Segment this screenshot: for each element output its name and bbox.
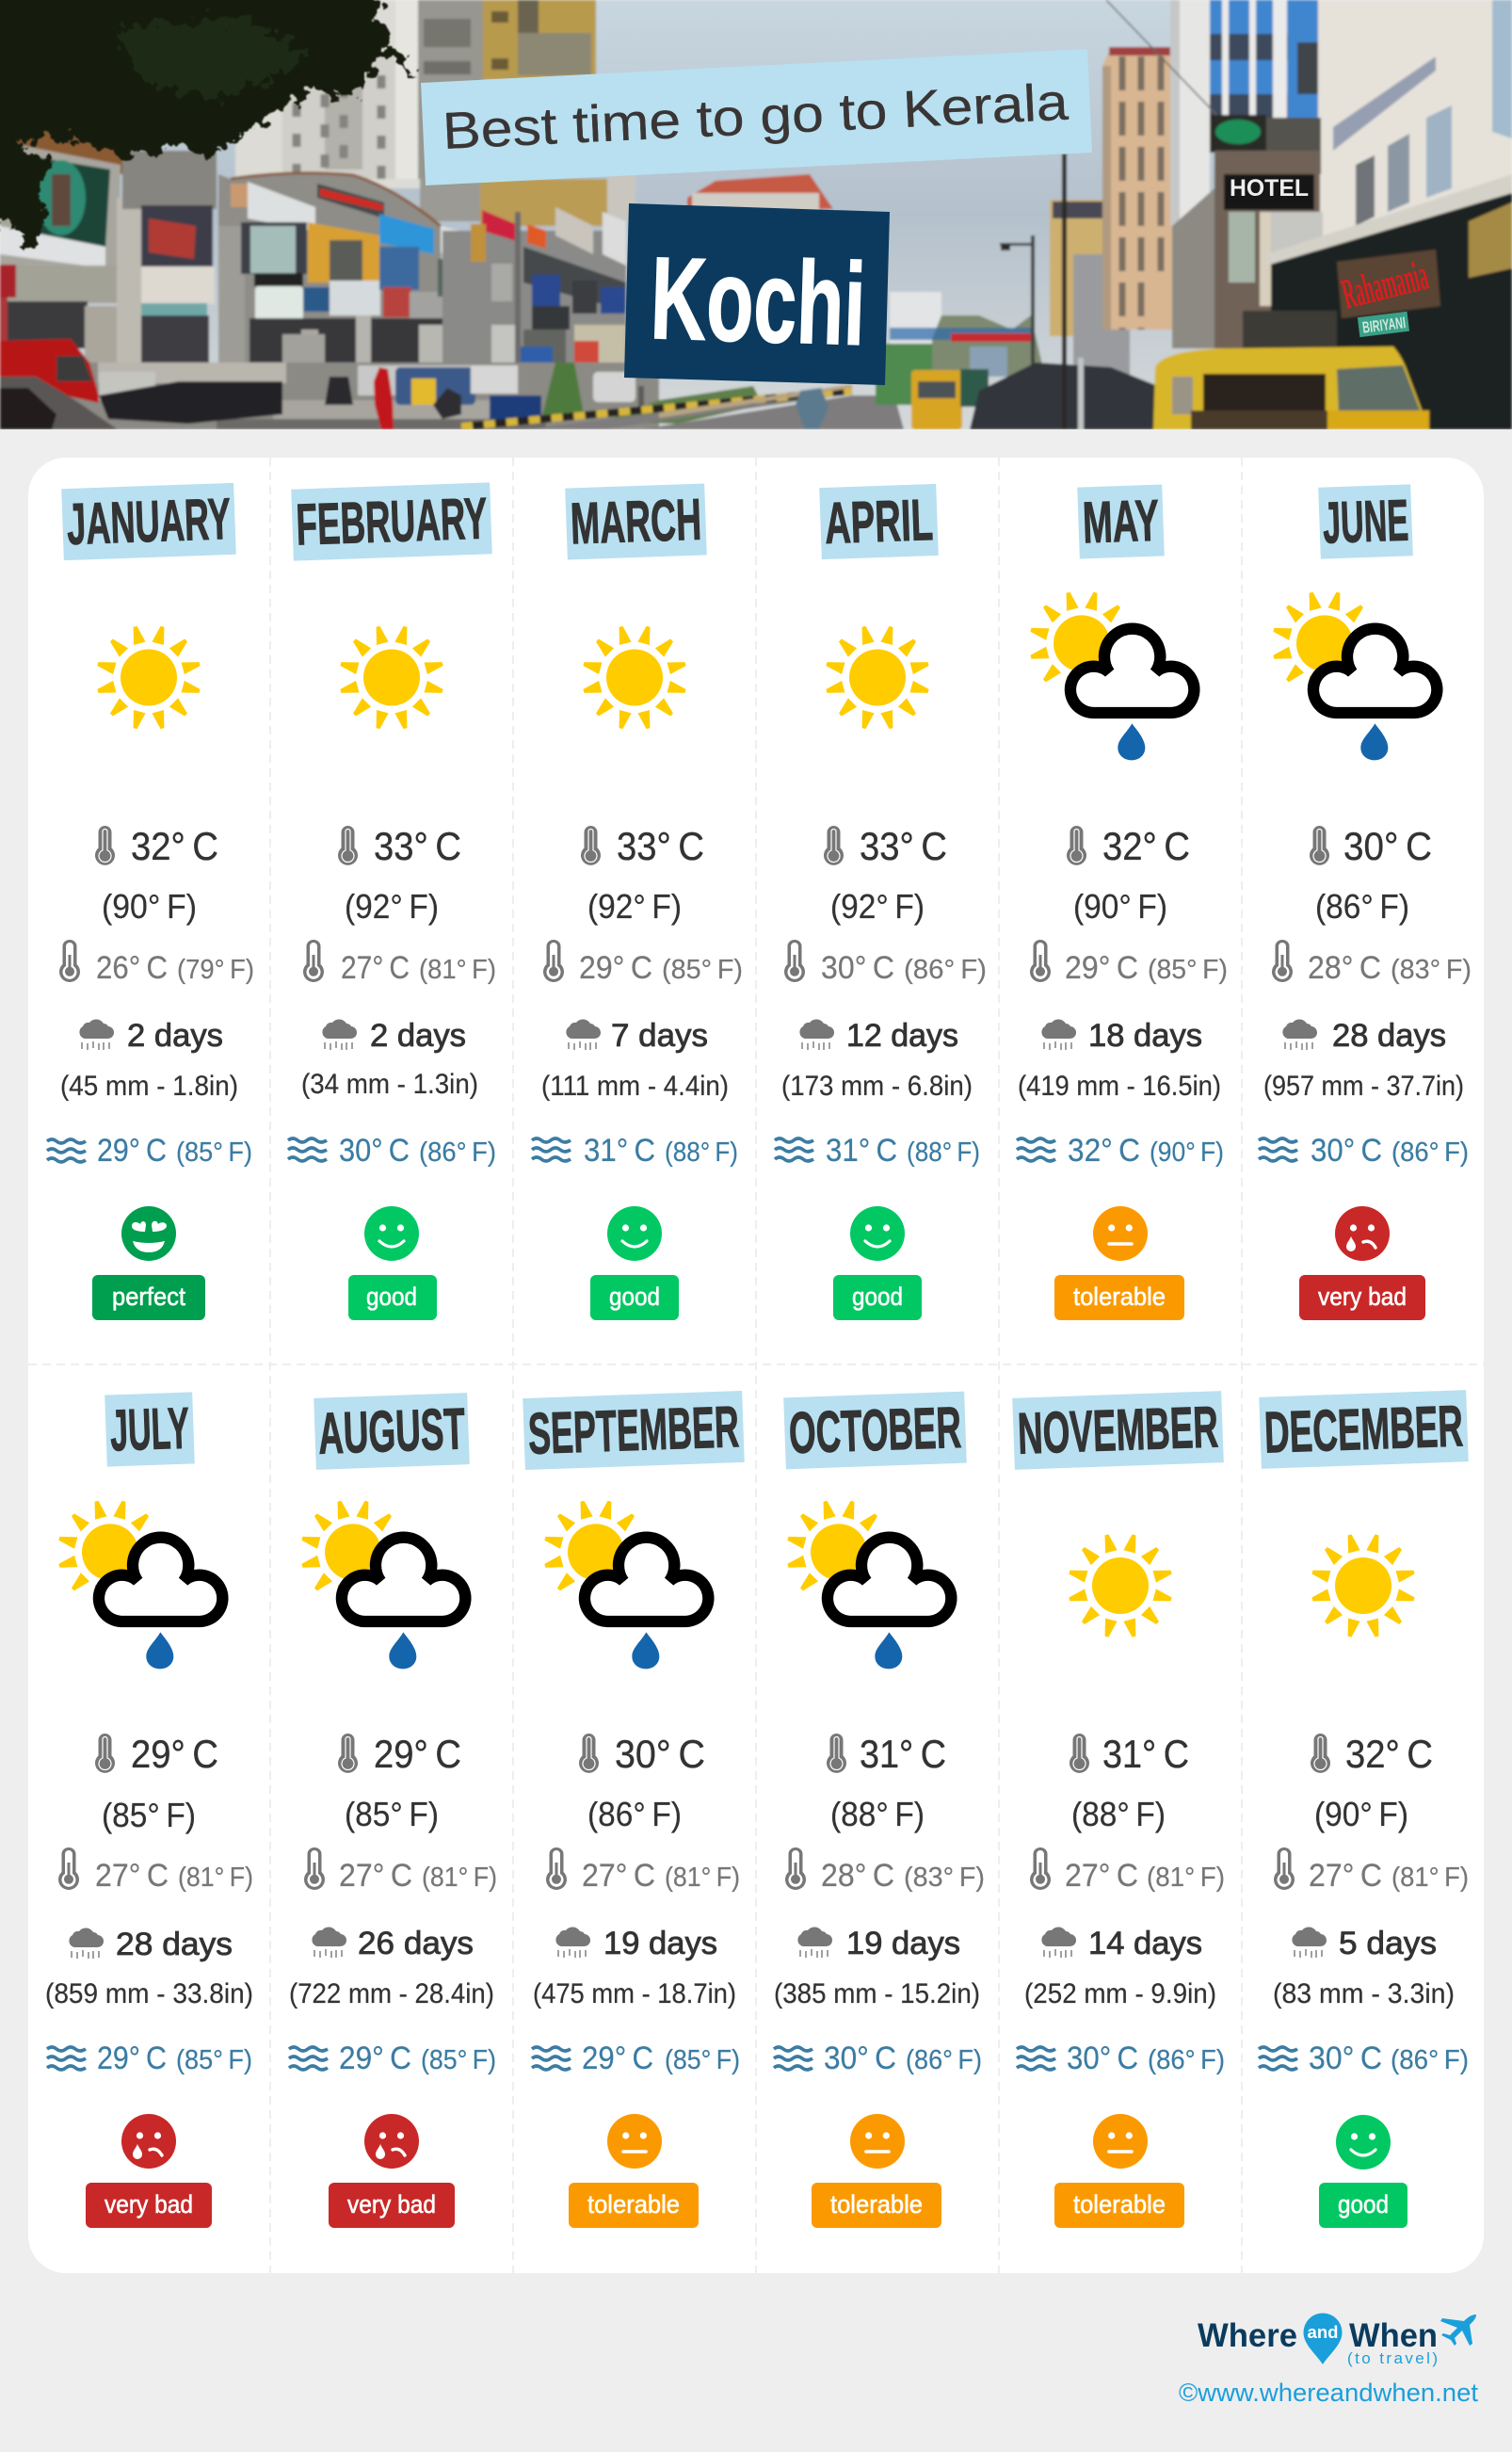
icon: rain cloud [1041,1019,1076,1050]
month heading: July [105,1392,195,1467]
logo pin: and [1307,2323,1339,2342]
photo signage: biryani: BIRIYANI [1361,314,1407,337]
icon: rain cloud [1282,1019,1317,1050]
rating badge: tolerable: tolerable [1073,2190,1166,2218]
icon: sun [1311,1533,1416,1638]
icon: face good [607,1206,662,1261]
icon: sun [96,625,201,730]
icon: rain cloud [312,1927,346,1958]
sea temperature: 30° C [339,1133,410,1169]
sea temperature Fahrenheit: (86° F) [419,1137,496,1168]
high temperature Fahrenheit: (86° F) [587,1795,682,1833]
month heading: August [314,1393,470,1470]
city label: Kochi: Kochi [649,234,867,370]
low temperature: 27° C [339,1858,412,1894]
icon: sea waves [47,2047,86,2070]
month heading: January: JANUARY [66,487,232,557]
rainy days: 18 days [1088,1018,1202,1054]
icon: sea waves [1259,1138,1297,1161]
rating badge: tolerable [812,2183,941,2228]
logo word: When: When [1349,2317,1438,2354]
icon: face tolerable [607,2114,662,2169]
high temperature Fahrenheit: (86° F) [1315,887,1409,926]
high temperature: 29° C [374,1732,461,1776]
icon: sea waves [1017,2047,1055,2070]
icon: rain cloud [79,1019,114,1050]
icon: sun, cloud and rain [57,1500,222,1669]
icon: rain cloud [566,1019,601,1050]
rating badge: very bad [86,2183,212,2228]
rating badge: good [833,1275,922,1320]
sea temperature Fahrenheit: (86° F) [1148,2045,1225,2075]
high temperature: 32° C [131,824,218,868]
rainy days: 14 days [1088,1926,1202,1961]
high temperature: 33° C [617,824,704,868]
sea temperature: 29° C [97,2041,167,2076]
month heading: November [1012,1391,1224,1470]
panel: April [775,484,987,1320]
panel: June [1259,484,1472,1320]
high temperature: 33° C [860,824,947,868]
rainy days: 2 days [370,1018,466,1054]
low temperature: 27° C [1065,1858,1138,1894]
low temperature: 27° C [95,1858,169,1894]
rating badge: very bad: very bad [105,2190,193,2218]
month heading: October: OCTOBER [788,1395,962,1466]
icon: rain cloud [69,1928,104,1959]
rating badge: tolerable [1054,1275,1184,1320]
icon: sea waves [532,2047,571,2070]
month heading: May: MAY [1082,489,1160,556]
tree [0,0,419,250]
sea temperature Fahrenheit: (85° F) [176,1137,252,1168]
high temperature: 30° C [1343,824,1432,868]
rating badge: good: good [1338,2190,1389,2218]
photo signage: hotel: HOTEL [1230,175,1309,202]
icon: thermometer high [827,1734,846,1773]
icon: sun, cloud and rain [543,1500,708,1669]
month heading: February: FEBRUARY [295,486,489,558]
icon: thermometer high [1067,826,1086,865]
rating badge: good: good [609,1282,660,1311]
icon: sea waves [47,1139,86,1162]
icon: face tolerable [850,2114,905,2169]
icon: face very bad [1335,1206,1390,1261]
icon: thermometer high [338,826,358,865]
sea temperature: 29° C [582,2041,653,2076]
icon: rain cloud [799,1019,834,1050]
icon: sun, cloud and rain [786,1500,951,1669]
icon: thermometer low [546,1847,567,1890]
icon: face tolerable [1093,1206,1148,1261]
icon: sea waves [1017,1138,1055,1161]
sea temperature: 30° C [824,2041,896,2076]
precipitation: (957 mm - 37.7in) [1263,1071,1464,1102]
icon: sun [339,625,444,730]
rainy days: 5 days [1339,1926,1437,1961]
low temperature: 29° C [579,950,652,986]
low temperature: 28° C [821,1858,894,1894]
low temperature Fahrenheit: (85° F) [662,955,743,985]
sea temperature: 31° C [826,1133,897,1169]
central shopping building [218,173,442,367]
icon: rain cloud [797,1927,832,1958]
panel: December [1259,1390,1469,2228]
low temperature: 27° C [341,950,410,986]
icon: thermometer high [581,826,601,865]
high temperature: 32° C [1102,824,1190,868]
sea temperature: 29° C [97,1133,167,1169]
low temperature Fahrenheit: (79° F) [177,955,254,985]
precipitation: (83 mm - 3.3in) [1273,1978,1455,2009]
rating badge: good [1319,2183,1407,2228]
icon: face good [850,1206,905,1261]
low temperature Fahrenheit: (81° F) [419,955,496,985]
distance [890,292,941,350]
high temperature: 31° C [1102,1732,1189,1776]
rating badge: good [348,1275,437,1320]
sea temperature: 32° C [1068,1133,1140,1169]
precipitation: (419 mm - 16.5in) [1018,1071,1221,1102]
header photo: Kochi street scene [0,0,1512,429]
icon: thermometer high [824,826,844,865]
high temperature Fahrenheit: (88° F) [1071,1795,1166,1833]
icon: thermometer low [1030,1847,1051,1890]
precipitation: (859 mm - 33.8in) [45,1978,253,2009]
icon: face good [364,1206,419,1261]
logo icon: plane [1440,2315,1476,2346]
icon: sun [582,625,687,730]
rainy days: 28 days [116,1927,233,1962]
sea temperature Fahrenheit: (85° F) [665,2045,740,2075]
low temperature: 28° C [1308,950,1381,986]
panel: May [1017,484,1228,1320]
logo pin [1303,2313,1343,2364]
rainy days: 7 days [611,1018,708,1054]
icon: thermometer low [58,1847,79,1890]
high temperature: 32° C [1345,1732,1433,1776]
high temperature: 29° C [131,1732,218,1776]
icon: thermometer low [785,1847,806,1890]
icon: sea waves [288,1138,327,1161]
month heading: September [523,1391,745,1470]
icon: face perfect [121,1206,176,1261]
rainy days: 12 days [846,1018,958,1054]
high temperature Fahrenheit: (90° F) [1314,1795,1408,1833]
sea temperature: 31° C [584,1133,655,1169]
month heading: February [291,482,492,561]
low temperature: 27° C [1309,1858,1382,1894]
icon: thermometer low [1272,940,1293,982]
sea temperature Fahrenheit: (88° F) [907,1137,980,1168]
rating badge: very bad: very bad [1318,1282,1407,1311]
high temperature: 31° C [860,1732,946,1776]
high temperature Fahrenheit: (92° F) [345,887,439,926]
sea temperature: 30° C [1309,2041,1382,2076]
low temperature Fahrenheit: (83° F) [1391,955,1472,985]
sea temperature Fahrenheit: (86° F) [906,2045,982,2075]
month heading: April [819,484,939,559]
high temperature: 33° C [374,824,461,868]
logo word: Where: Where [1198,2317,1297,2354]
sea temperature Fahrenheit: (85° F) [421,2045,496,2075]
panel: September [523,1391,745,2228]
precipitation: (252 mm - 9.9in) [1024,1978,1216,2009]
low temperature: 26° C [96,950,168,986]
sea temperature: 29° C [339,2041,411,2076]
sea temperature Fahrenheit: (85° F) [176,2045,252,2075]
rainy days: 26 days [358,1926,474,1961]
month heading: January [61,483,236,560]
month heading: November: NOVEMBER [1017,1395,1219,1467]
icon: sea waves [289,2047,328,2070]
low temperature: 30° C [821,950,894,986]
sea temperature Fahrenheit: (90° F) [1150,1137,1224,1168]
sea temperature: 30° C [1311,1133,1382,1169]
rainy days: 28 days [1332,1018,1446,1054]
rating badge: tolerable: tolerable [587,2190,680,2218]
sea temperature: 30° C [1067,2041,1138,2076]
icon: rain cloud [555,1927,590,1958]
logo tagline: (to travel) [1347,2349,1438,2367]
white card panel [28,458,1484,2273]
icon: sun, cloud and rain [1272,591,1437,760]
right towers [1050,200,1106,336]
title banner: Best time to go to Kerala [421,49,1092,186]
low temperature: 29° C [1065,950,1138,986]
icon: thermometer low [303,940,324,982]
icon: sea waves [774,2047,812,2070]
icon: thermometer low [304,1847,325,1890]
precipitation: (34 mm - 1.3in) [301,1069,478,1100]
footer logo: Where and When [1198,2313,1476,2367]
low temperature Fahrenheit: (81° F) [1147,1863,1225,1893]
icon: thermometer low [1030,940,1051,982]
month heading: April: APRIL [824,488,934,557]
month heading: June [1318,484,1413,559]
panel: February [288,482,496,1320]
left billboards [15,128,124,175]
icon: thermometer high [1070,1734,1089,1773]
sea temperature Fahrenheit: (86° F) [1391,1137,1469,1168]
high temperature Fahrenheit: (92° F) [587,887,682,926]
rainy days: 2 days [127,1018,223,1054]
icon: face good [1336,2115,1391,2170]
icon: sun [1068,1533,1173,1638]
panel: October [774,1392,985,2228]
month heading: July: JULY [109,1396,190,1463]
panel: August [289,1393,497,2228]
icon: thermometer low [59,940,80,982]
rating badge: good: good [852,1282,903,1311]
rating badge: perfect [92,1275,205,1320]
icon: face very bad [121,2114,176,2169]
low temperature Fahrenheit: (81° F) [422,1863,497,1893]
icon: thermometer low [1274,1847,1295,1890]
rating badge: very bad: very bad [347,2190,436,2218]
icon: thermometer high [1310,826,1329,865]
panel: July [45,1392,253,2228]
precipitation: (173 mm - 6.8in) [781,1071,973,1102]
precipitation: (111 mm - 4.4in) [541,1071,729,1102]
city label: Kochi [624,203,890,385]
low temperature Fahrenheit: (83° F) [904,1863,985,1893]
rating badge: tolerable [569,2183,699,2228]
high temperature Fahrenheit: (90° F) [1073,887,1167,926]
rating badge: very bad [1299,1275,1425,1320]
low temperature Fahrenheit: (86° F) [904,955,987,985]
icon: sun [825,625,930,730]
panel: November [1012,1391,1225,2228]
icon: thermometer high [95,1734,115,1773]
icon: sea waves [1259,2047,1297,2070]
month heading: June: JUNE [1322,488,1409,557]
high temperature Fahrenheit: (85° F) [345,1795,439,1833]
low temperature Fahrenheit: (81° F) [1391,1863,1469,1893]
right shops [442,231,626,372]
low temperature Fahrenheit: (81° F) [178,1863,253,1893]
icon: sun, cloud and rain [1029,591,1194,760]
low temperature Fahrenheit: (85° F) [1148,955,1228,985]
sea temperature Fahrenheit: (86° F) [1391,2045,1469,2075]
sea temperature Fahrenheit: (88° F) [665,1137,738,1168]
rating badge: very bad [329,2183,455,2228]
icon: face very bad [364,2114,419,2169]
panel: January [47,483,254,1320]
month heading: October [783,1392,967,1469]
high temperature Fahrenheit: (92° F) [830,887,925,926]
precipitation: (45 mm - 1.8in) [60,1071,238,1102]
rainy days: 19 days [603,1926,717,1961]
high temperature Fahrenheit: (85° F) [102,1796,196,1834]
high temperature: 30° C [615,1732,705,1776]
icon: sea waves [775,1138,813,1161]
icon: thermometer high [579,1734,599,1773]
low temperature Fahrenheit: (81° F) [665,1863,740,1893]
title banner: Best time to go to Kerala: Best time to go to Kerala [442,73,1070,160]
icon: face tolerable [1093,2114,1148,2169]
photo signage: biryani [1358,312,1409,337]
rating badge: good [590,1275,679,1320]
rating badge: tolerable [1054,2183,1184,2228]
high temperature Fahrenheit: (88° F) [830,1795,925,1833]
high temperature Fahrenheit: (90° F) [102,887,197,926]
icon: thermometer high [95,826,115,865]
month heading: March: MARCH [570,488,702,557]
rating badge: good: good [366,1282,417,1311]
rating badge: tolerable: tolerable [1073,1282,1166,1311]
icon: thermometer low [784,940,805,982]
low temperature: 27° C [582,1858,655,1894]
street level [0,363,659,429]
precipitation: (722 mm - 28.4in) [289,1978,494,2009]
icon: thermometer high [1311,1734,1330,1773]
month heading: August: AUGUST [317,1396,466,1467]
panel: March [532,483,743,1320]
month heading: May [1077,484,1165,559]
icon: rain cloud [322,1019,357,1050]
icon: sun, cloud and rain [300,1500,465,1669]
icon: thermometer low [543,940,564,982]
icon: sea waves [532,1138,571,1161]
icon: rain cloud [1041,1927,1076,1958]
rating badge: perfect: perfect [112,1282,185,1311]
month heading: March [565,483,707,560]
website credit: ©www.whereandwhen.net [1179,2379,1478,2407]
icon: thermometer high [338,1734,358,1773]
icon: rain cloud [1292,1927,1327,1958]
month heading: September: SEPTEMBER [527,1395,740,1467]
precipitation: (385 mm - 15.2in) [774,1978,980,2009]
precipitation: (475 mm - 18.7in) [533,1978,736,2009]
rainy days: 19 days [846,1926,960,1961]
rating badge: tolerable: tolerable [830,2190,923,2218]
